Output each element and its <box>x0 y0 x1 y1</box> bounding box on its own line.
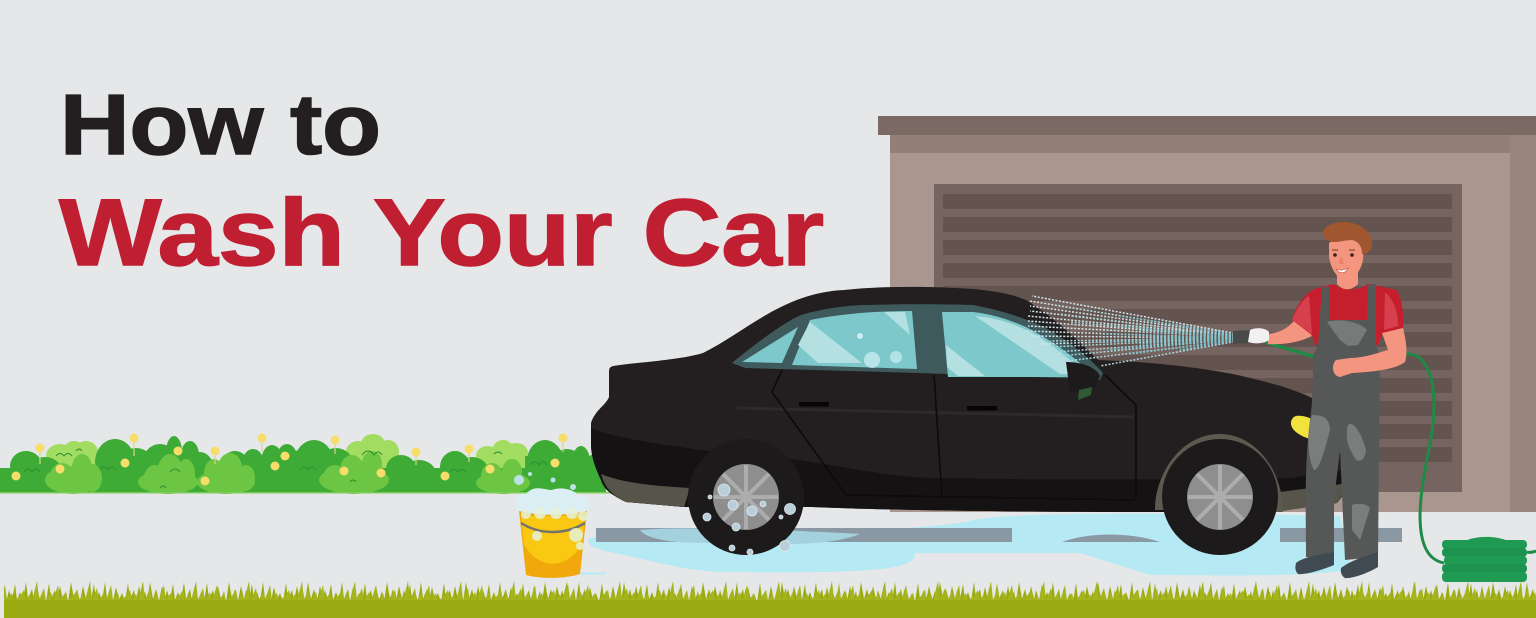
front wheel arch <box>1155 434 1283 512</box>
red t-shirt <box>1292 284 1403 345</box>
hose reel <box>1442 537 1536 582</box>
rear bumper trim <box>601 474 690 507</box>
soap bubbles <box>521 507 588 550</box>
rear door window <box>792 311 917 369</box>
white glove <box>1248 328 1269 343</box>
face <box>1332 250 1355 273</box>
overall bib and straps <box>1313 284 1380 356</box>
flower stems <box>40 442 563 465</box>
front bumper trim <box>1280 483 1350 511</box>
title <box>59 78 824 286</box>
front door window <box>942 312 1094 377</box>
headlight <box>1291 416 1314 439</box>
man washing the car <box>1233 222 1444 578</box>
left arm <box>1268 316 1312 344</box>
overall wet patches <box>1308 415 1370 540</box>
roller door <box>934 184 1462 492</box>
overall legs <box>1306 354 1380 560</box>
hose behind man <box>1405 354 1444 563</box>
door lines <box>772 370 1136 500</box>
car body <box>591 287 1352 512</box>
bucket with soap foam <box>514 472 590 578</box>
dark bushes <box>0 436 607 493</box>
hair <box>1323 222 1372 254</box>
rear quarter window <box>742 327 798 363</box>
heading line: How to: How to <box>60 78 381 173</box>
grass <box>4 580 1536 618</box>
bucket rim band <box>521 523 585 532</box>
foam <box>515 488 590 524</box>
nozzle <box>1233 330 1250 344</box>
garage roof <box>878 116 1536 135</box>
front wheel <box>1162 439 1278 555</box>
hose to nozzle <box>1265 342 1334 364</box>
flowers <box>12 434 568 486</box>
side mirror <box>1066 362 1100 392</box>
head <box>1329 239 1363 281</box>
green mirror reflection <box>1078 387 1092 400</box>
rear wheel <box>688 439 804 555</box>
rear wheel arch <box>680 432 812 507</box>
car <box>591 287 1352 555</box>
light bushes <box>45 451 530 494</box>
door handles <box>799 402 997 410</box>
body crease <box>737 408 1134 417</box>
leaf marks <box>24 449 547 488</box>
garage <box>878 116 1536 512</box>
hedge <box>0 434 612 494</box>
window frame <box>732 304 1103 380</box>
pale bushes <box>44 434 529 480</box>
heading line: Wash Your Car: Wash Your Car <box>59 180 824 286</box>
lower body shadow <box>591 428 1352 512</box>
right arm <box>1333 328 1406 377</box>
bucket body <box>519 511 587 578</box>
garage wall <box>890 135 1536 512</box>
neck <box>1337 268 1358 289</box>
water puddle <box>580 513 1402 576</box>
water spray <box>1026 296 1238 366</box>
boots <box>1295 552 1378 578</box>
